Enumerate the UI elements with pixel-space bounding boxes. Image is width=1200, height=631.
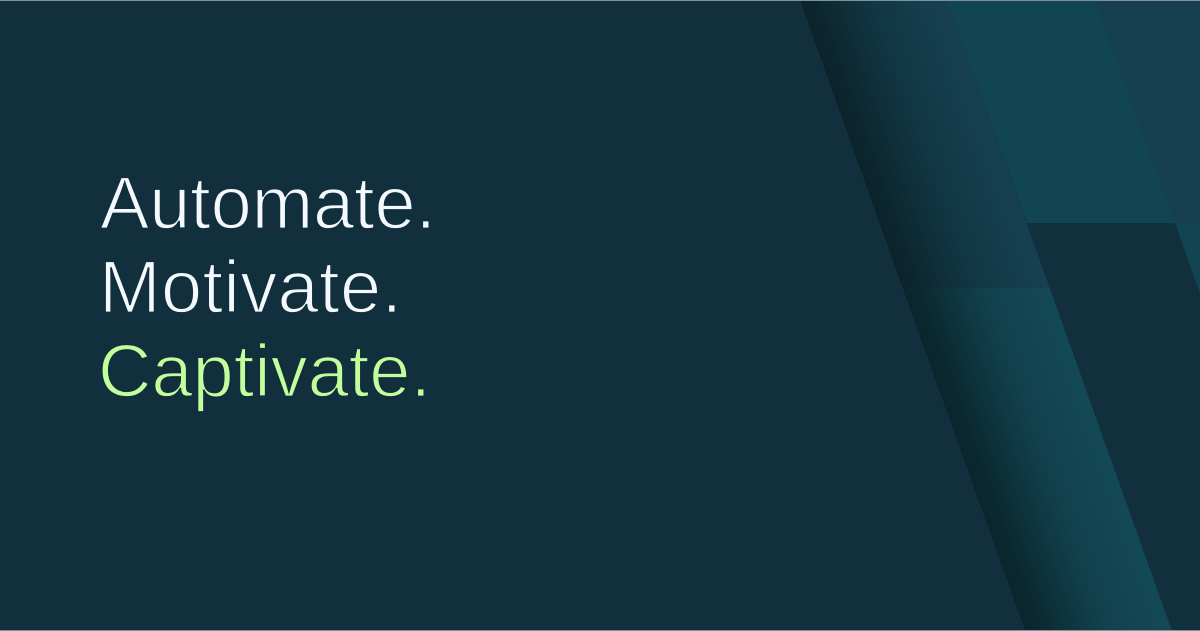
top edge line [0, 0, 1200, 1]
headline line: Captivate: Captivate. [98, 330, 431, 412]
decorative strip: right upper block [1095, 0, 1200, 293]
headline [98, 162, 436, 412]
headline line: Automate: Automate. [100, 162, 436, 244]
bottom edge line [0, 630, 1200, 631]
decorative strip: right lower teal block [1175, 223, 1200, 293]
decorative strip: left lower gradient [903, 288, 1172, 631]
decorative strip: left upper gradient [800, 0, 1050, 288]
headline line: Motivate: Motivate. [99, 246, 402, 328]
decorative strip: middle teal block [947, 0, 1175, 223]
